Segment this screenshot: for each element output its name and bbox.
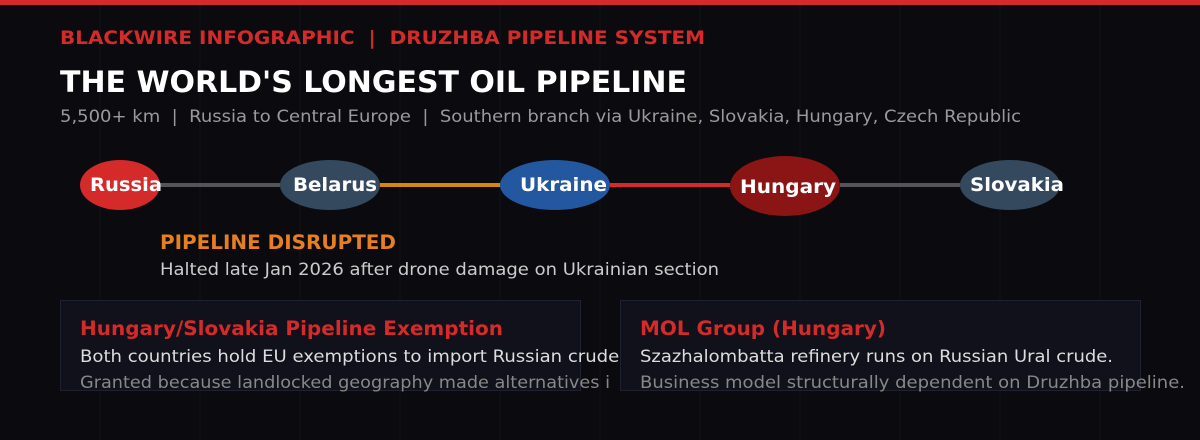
panel: exemption: Hungary/Slovakia Pipeline Exemption [80,317,503,340]
panel: MOL Group: Business model structurally dependent on Druzhba pipeline. [640,373,1185,393]
node: Hungary: Hungary [740,176,837,198]
node: Hungary [730,156,840,216]
node: Russia: Russia [90,174,162,196]
node: Belarus [280,160,380,210]
disruption callout: Halted late Jan 2026 after drone damage on Ukrainian section [160,260,719,280]
panel: MOL Group: Szazhalombatta refinery runs on Russian Ural crude. [640,347,1113,367]
node: Belarus: Belarus [293,174,377,196]
subtitle: 5,500+ km | Russia to Central Europe | Southern branch via Ukraine, Slovakia, Hungary, Czech Republic [60,107,1021,127]
title: THE WORLD'S LONGEST OIL PIPELINE [60,65,687,99]
disruption callout: PIPELINE DISRUPTED [160,231,396,254]
header label: BLACKWIRE INFOGRAPHIC | DRUZHBA PIPELINE SYSTEM [60,27,705,49]
panel: exemption [60,300,625,393]
node: Slovakia: Slovakia [970,174,1064,196]
panel: MOL Group: MOL Group (Hungary) [640,317,886,340]
disruption callout [160,231,719,280]
panel: exemption: Granted because landlocked geography made alternatives i [80,373,610,393]
node: Slovakia [960,160,1064,210]
node: Ukraine: Ukraine [520,174,607,196]
panel: MOL Group [620,300,1185,393]
panel: exemption: Both countries hold EU exemptions to import Russian crude. [80,347,625,367]
pipeline route diagram [80,156,1064,216]
node: Russia [80,160,162,210]
node: Ukraine [500,160,610,210]
